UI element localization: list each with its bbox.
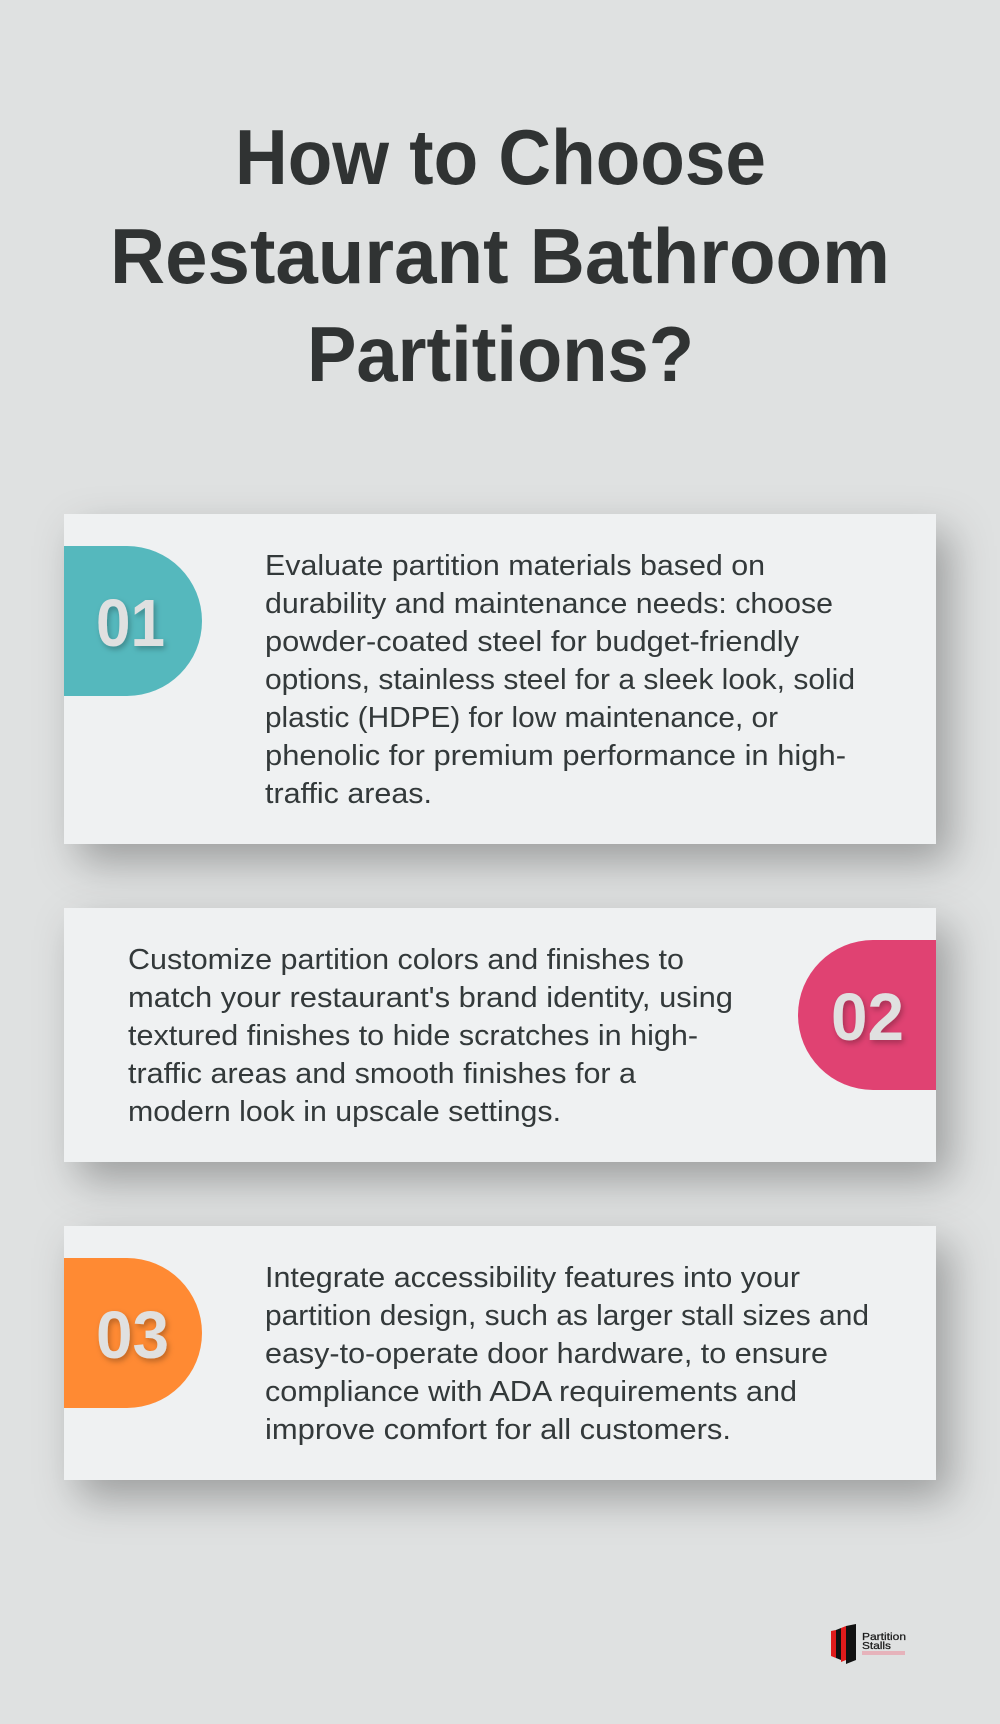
text block 03: compliance with ADA requirements and: [265, 1376, 797, 1408]
text block 02: match your restaurant's brand identity, using: [128, 982, 733, 1014]
title: Partitions?: [307, 310, 694, 398]
panel: step 01: [64, 514, 936, 844]
panel: step 02: [64, 908, 936, 1162]
badge 02: [798, 940, 936, 1090]
text block 01: traffic areas.: [265, 778, 432, 810]
text block 03: improve comfort for all customers.: [265, 1414, 731, 1446]
text block 01: phenolic for premium performance in high-: [265, 740, 846, 772]
text block 01: powder-coated steel for budget-friendly: [265, 626, 800, 658]
text block 01: Evaluate partition materials based on: [265, 550, 765, 582]
text block 03: Integrate accessibility features into your: [265, 1262, 801, 1294]
text block 03: partition design, such as larger stall sizes and: [265, 1300, 869, 1332]
badge 01: [64, 546, 202, 696]
card background 01: [64, 514, 936, 844]
text block 01: plastic (HDPE) for low maintenance, or: [265, 702, 779, 734]
text block 01: options, stainless steel for a sleek look, solid: [265, 664, 855, 696]
logo: Partition Stalls: Stalls: [862, 1640, 891, 1652]
text block 02: textured finishes to hide scratches in high-: [128, 1020, 698, 1052]
logo: Partition Stalls: [831, 1624, 906, 1664]
icon: partition bars: [831, 1624, 856, 1664]
panel: step 03: [64, 1226, 936, 1480]
text block 02: [128, 944, 733, 1128]
title: Restaurant Bathroom: [110, 212, 890, 300]
number 03: 03: [96, 1298, 169, 1373]
card background 03: [64, 1226, 936, 1480]
title: How to Choose: [235, 113, 766, 201]
text block 02: modern look in upscale settings.: [128, 1096, 561, 1128]
number 01: 01: [96, 586, 165, 661]
number 02: 02: [831, 980, 904, 1055]
text block 03: easy-to-operate door hardware, to ensure: [265, 1338, 828, 1370]
text block 01: durability and maintenance needs: choose: [265, 588, 833, 620]
logo wordmark: Partition: [862, 1631, 906, 1643]
title: [110, 113, 890, 398]
text block 02: Customize partition colors and finishes to: [128, 944, 684, 976]
logo tagline bar: [862, 1651, 905, 1655]
card background 02: [64, 908, 936, 1162]
badge 03: [64, 1258, 202, 1408]
text block 01: [265, 550, 855, 810]
text block 03: [265, 1262, 869, 1446]
text block 02: traffic areas and smooth finishes for a: [128, 1058, 636, 1090]
